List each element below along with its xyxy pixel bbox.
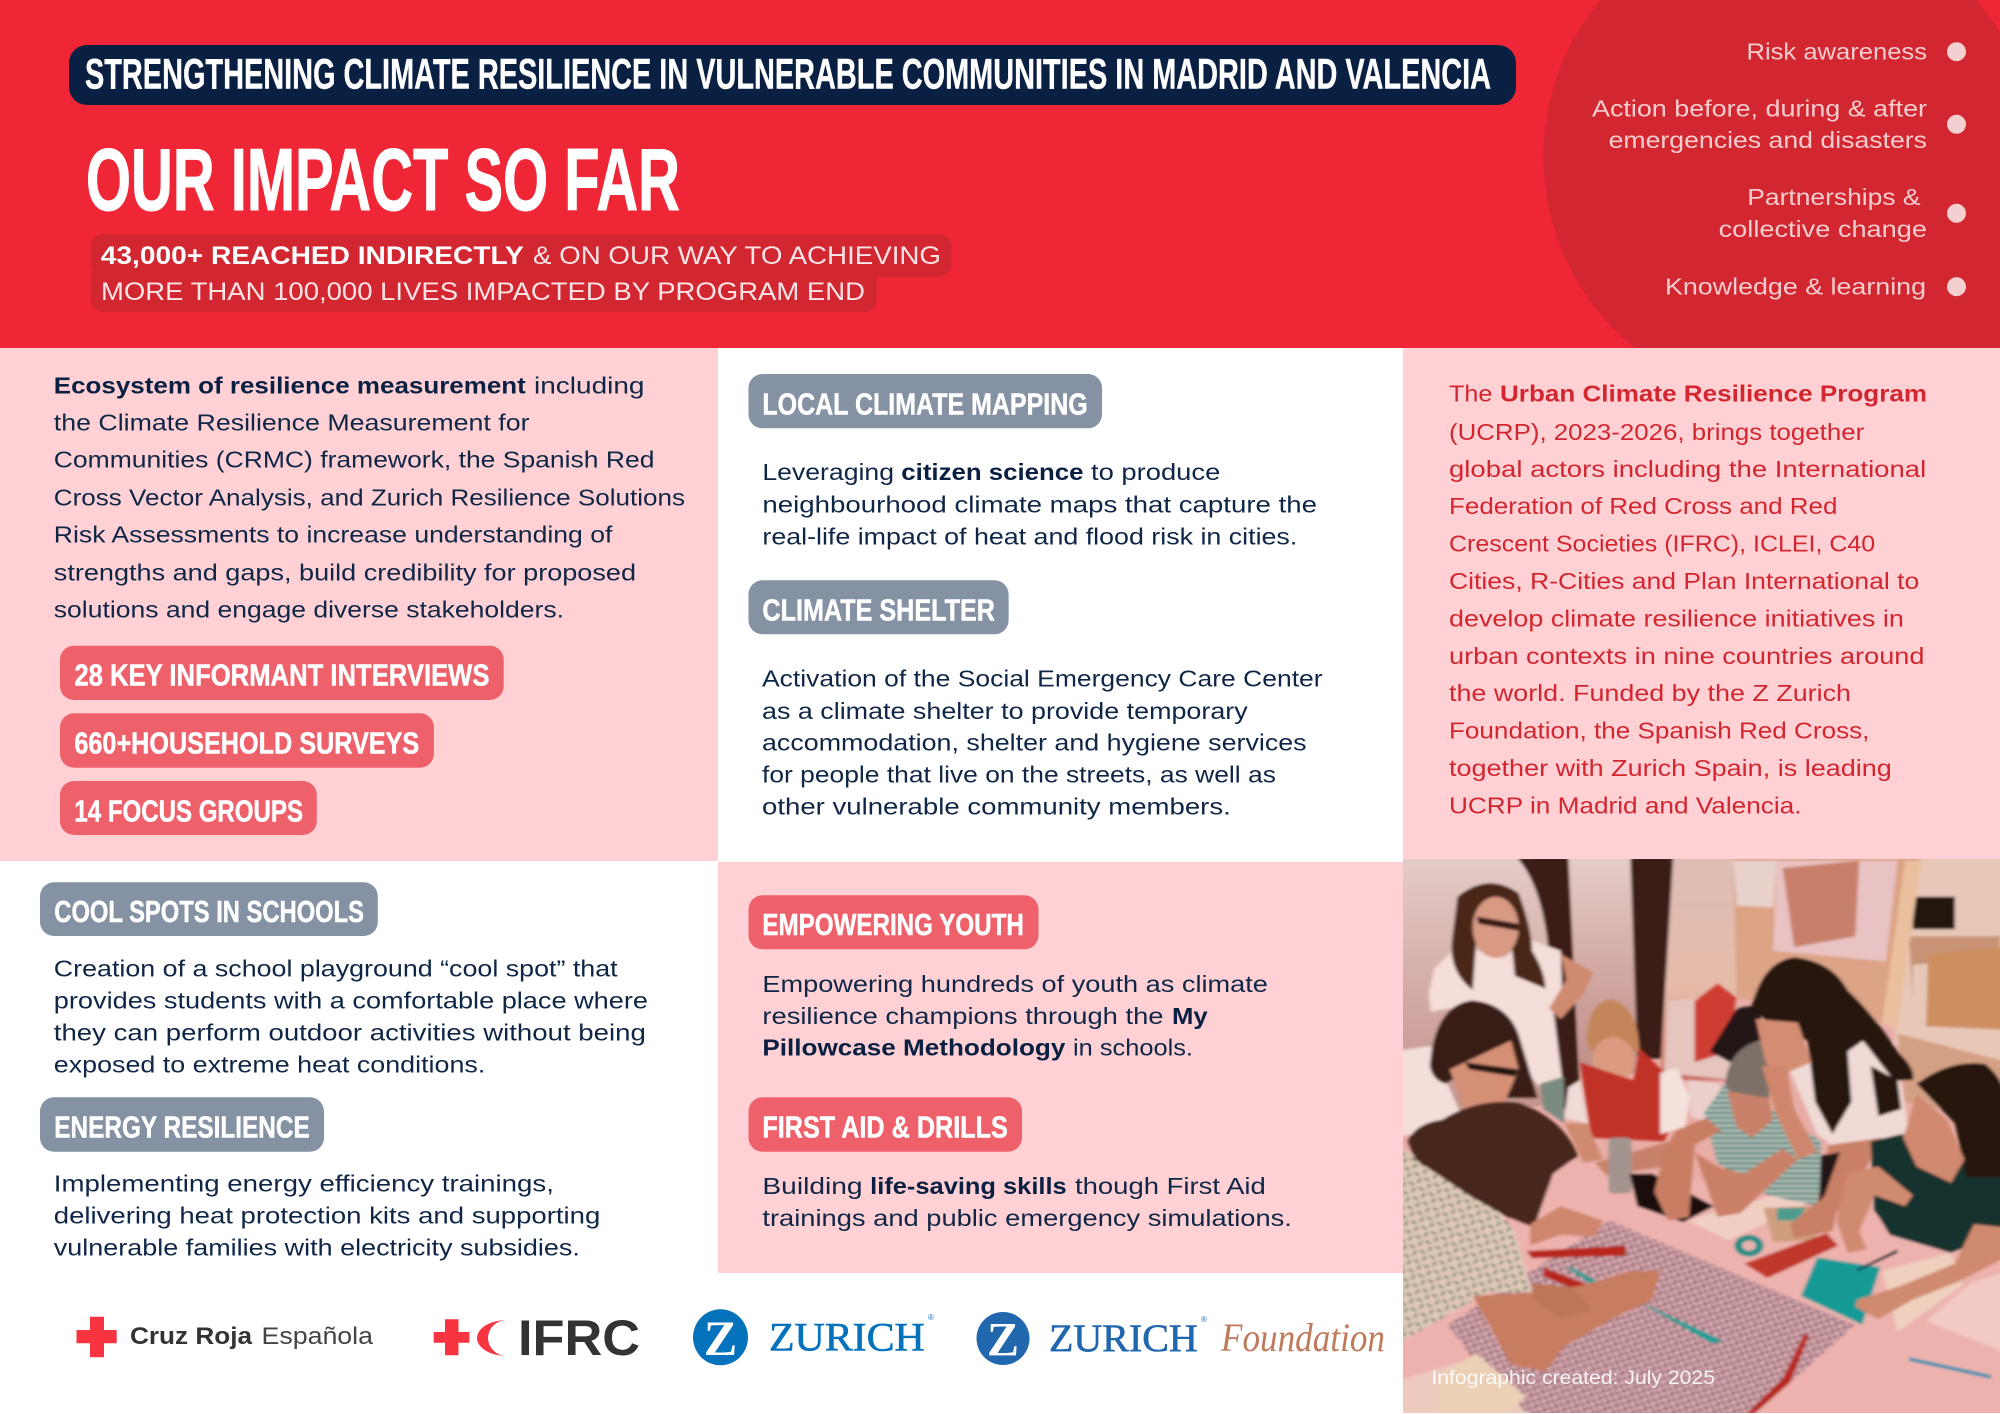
woman with glasses on left xyxy=(1403,1045,1462,1138)
text block: climate shelter: accommodation, shelter and hygiene services xyxy=(762,730,1307,756)
text block: cool spots: they can perform outdoor activities without being xyxy=(54,1020,646,1046)
text block: empowering youth: Pillowcase Methodology xyxy=(762,1035,1066,1061)
text block: UCRP description: global actors including the International xyxy=(1449,456,1926,482)
text block: climate shelter xyxy=(762,666,1323,820)
stat pill: surveys xyxy=(60,713,434,768)
text block: UCRP description: Cities, R-Cities and Plan International to xyxy=(1449,568,1919,594)
text block: local climate mapping: real-life impact of heat and flood risk in cities. xyxy=(762,523,1297,549)
text block: local climate mapping xyxy=(762,459,1317,549)
pillar: partnerships xyxy=(1719,184,1966,242)
text block: energy resilience xyxy=(54,1171,600,1261)
logo: Cruz Roja Española: Cruz Roja xyxy=(130,1323,252,1350)
pillar: partnerships: collective change xyxy=(1719,216,1927,242)
text block: cool spots xyxy=(54,956,648,1078)
heading pill: energy resilience xyxy=(40,1097,324,1152)
pillar: action: emergencies and disasters xyxy=(1609,127,1927,153)
text block: ecosystem: the Climate Resilience Measurement for xyxy=(54,409,530,435)
text block: ecosystem: Communities (CRMC) framework, the Spanish Red xyxy=(54,447,655,473)
stat pill: focus groups: 14 FOCUS GROUPS xyxy=(74,793,303,828)
text block: first aid: trainings and public emergency simulations. xyxy=(762,1205,1292,1231)
text block: UCRP description xyxy=(1449,381,1927,818)
logo: IFRC: IFRC xyxy=(518,1310,640,1366)
text block: local climate mapping: citizen science xyxy=(901,459,1084,485)
logo: IFRC xyxy=(434,1310,640,1366)
text block: local climate mapping: neighbourhood climate maps that capture the xyxy=(762,491,1317,517)
text block: climate shelter: for people that live on the streets, as well as xyxy=(762,762,1276,788)
photo: workshop participants around a map xyxy=(1392,843,2000,1414)
heading pill: climate shelter: CLIMATE SHELTER xyxy=(762,593,995,628)
text block: first aid: Building xyxy=(762,1173,863,1199)
text block: UCRP description: Federation of Red Cross and Red xyxy=(1449,493,1837,519)
text block: UCRP description: urban contexts in nine countries around xyxy=(1449,643,1924,669)
text block: energy resilience: delivering heat protection kits and supporting xyxy=(54,1203,600,1229)
text block: first aid: though First Aid xyxy=(1075,1173,1266,1199)
heading pill: local climate mapping: LOCAL CLIMATE MAPPING xyxy=(762,386,1088,421)
standing woman xyxy=(1429,940,1563,1087)
subtitle callout xyxy=(91,234,952,312)
logo: Zurich xyxy=(693,1309,934,1366)
logo: Zurich Foundation: ® xyxy=(1201,1315,1207,1324)
text block: empowering youth: in schools. xyxy=(1073,1035,1193,1061)
woman on right xyxy=(1871,1134,2000,1253)
subtitle callout: & ON OUR WAY TO ACHIEVING xyxy=(533,242,941,270)
logo: Zurich Foundation: ZURICH xyxy=(1049,1317,1198,1360)
heading pill: first aid and drills xyxy=(748,1097,1022,1152)
text block: climate shelter: other vulnerable community members. xyxy=(762,794,1231,820)
title pill xyxy=(69,45,1516,105)
stat pill: focus groups xyxy=(60,781,317,835)
text block: empowering youth: My xyxy=(1172,1003,1208,1029)
pillar: partnerships: Partnerships & xyxy=(1747,184,1921,210)
heading pill: energy resilience: ENERGY RESILIENCE xyxy=(54,1109,310,1144)
text block: first aid: life-saving skills xyxy=(870,1173,1067,1199)
logo: Zurich: Z xyxy=(704,1310,737,1366)
decorative dark circle xyxy=(1544,0,2000,348)
logo: Zurich Foundation xyxy=(976,1312,1385,1366)
text block: UCRP description: Urban Climate Resilience Program xyxy=(1500,381,1927,407)
logo: Cruz Roja Española: Española xyxy=(262,1323,373,1350)
text block: cool spots: exposed to extreme heat conditions. xyxy=(54,1052,485,1078)
text block: empowering youth: resilience champions through the xyxy=(762,1003,1164,1029)
text block: ecosystem: Cross Vector Analysis, and Zurich Resilience Solutions xyxy=(54,484,685,510)
text block: UCRP description: The xyxy=(1449,381,1492,407)
text block: energy resilience: Implementing energy efficiency trainings, xyxy=(54,1171,554,1197)
subtitle callout: MORE THAN 100,000 LIVES IMPACTED BY PROGRAM END xyxy=(101,278,865,306)
text block: UCRP description: the world. Funded by the Z Zurich xyxy=(1449,680,1851,706)
heading pill: climate shelter xyxy=(748,580,1009,634)
list: program pillars xyxy=(1592,38,1966,299)
text block: local climate mapping: to produce xyxy=(1091,459,1220,485)
heading pill: empowering youth: EMPOWERING YOUTH xyxy=(762,907,1024,942)
logo: Zurich: ZURICH xyxy=(769,1315,925,1360)
text block: cool spots: provides students with a comfortable place where xyxy=(54,988,648,1014)
text block: UCRP description: together with Zurich Spain, is leading xyxy=(1449,755,1892,781)
text block: empowering youth: Empowering hundreds of youth as climate xyxy=(762,971,1268,997)
table xyxy=(1392,1159,2000,1414)
papers and tools xyxy=(1687,1195,1817,1240)
stat pill: interviews: 28 KEY INFORMANT INTERVIEWS xyxy=(74,658,490,693)
text block: UCRP description: Foundation, the Spanish Red Cross, xyxy=(1449,718,1869,744)
panel: local climate mapping and climate shelter xyxy=(748,374,1323,820)
text block: UCRP description: (UCRP), 2023-2026, brings together xyxy=(1449,419,1864,445)
header banner xyxy=(0,0,2000,348)
text block: climate shelter: Activation of the Social Emergency Care Center xyxy=(762,666,1323,692)
logo: Zurich Foundation: Foundation xyxy=(1220,1315,1385,1360)
text block: ecosystem: including xyxy=(534,372,644,398)
text block: energy resilience: vulnerable families with electricity subsidies. xyxy=(54,1235,580,1261)
heading pill: local climate mapping xyxy=(748,374,1102,428)
text block: ecosystem: solutions and engage diverse stakeholders. xyxy=(54,597,564,623)
text block: ecosystem: Risk Assessments to increase understanding of xyxy=(54,522,613,548)
text block: UCRP description: Crescent Societies (IFRC), ICLEI, C40 xyxy=(1449,531,1875,557)
panel: cool spots and energy resilience xyxy=(40,882,648,1261)
city map xyxy=(1448,1220,1855,1414)
text block: ecosystem xyxy=(54,372,685,623)
heading pill: cool spots in schools: COOL SPOTS IN SCHOOLS xyxy=(54,894,364,929)
woman with curly hair xyxy=(1786,1037,1909,1152)
background wall xyxy=(1403,859,1551,1112)
pillar: action: Action before, during & after xyxy=(1592,95,1927,121)
man with striped shirt xyxy=(1704,1084,1821,1206)
pillar: action xyxy=(1592,95,1966,153)
heading pill: first aid and drills: FIRST AID & DRILLS xyxy=(762,1109,1008,1144)
woman in red vest xyxy=(1587,999,1639,1051)
text block: empowering youth xyxy=(762,971,1268,1061)
heading pill: cool spots in schools xyxy=(40,882,378,936)
heading pill: empowering youth xyxy=(748,895,1038,949)
credit line: Infographic created: July 2025 xyxy=(1431,1367,1715,1389)
stat pill: surveys: 660+HOUSEHOLD SURVEYS xyxy=(74,726,419,761)
stat pill: interviews xyxy=(60,646,504,700)
text block: UCRP description: UCRP in Madrid and Valencia. xyxy=(1449,792,1802,818)
logo row xyxy=(76,1309,1385,1366)
text block: first aid xyxy=(762,1173,1292,1231)
text block: climate shelter: as a climate shelter to provide temporary xyxy=(762,698,1248,724)
text block: ecosystem: Ecosystem of resilience measurement xyxy=(54,372,526,398)
text block: UCRP description: develop climate resilience initiatives in xyxy=(1449,606,1904,632)
foreground woman xyxy=(1403,1150,1534,1340)
text block: local climate mapping: Leveraging xyxy=(762,459,894,485)
logo: Zurich: ® xyxy=(928,1313,934,1322)
subtitle callout: 43,000+ REACHED INDIRECTLY xyxy=(101,242,524,270)
text block: ecosystem: strengths and gaps, build credibility for proposed xyxy=(54,559,636,585)
panel: ecosystem of resilience measurement xyxy=(0,348,718,861)
pillar: knowledge: Knowledge & learning xyxy=(1665,273,1926,299)
text block: cool spots: Creation of a school playground “cool spot” that xyxy=(54,956,618,982)
pillar: risk awareness: Risk awareness xyxy=(1746,38,1927,64)
heading: our impact so far: OUR IMPACT SO FAR xyxy=(86,130,680,229)
logo: Zurich Foundation: Z xyxy=(987,1314,1019,1366)
panel: urban climate resilience program xyxy=(1403,348,2000,860)
logo: Cruz Roja Española xyxy=(76,1317,373,1357)
panel: empowering youth and first aid xyxy=(718,862,1403,1273)
